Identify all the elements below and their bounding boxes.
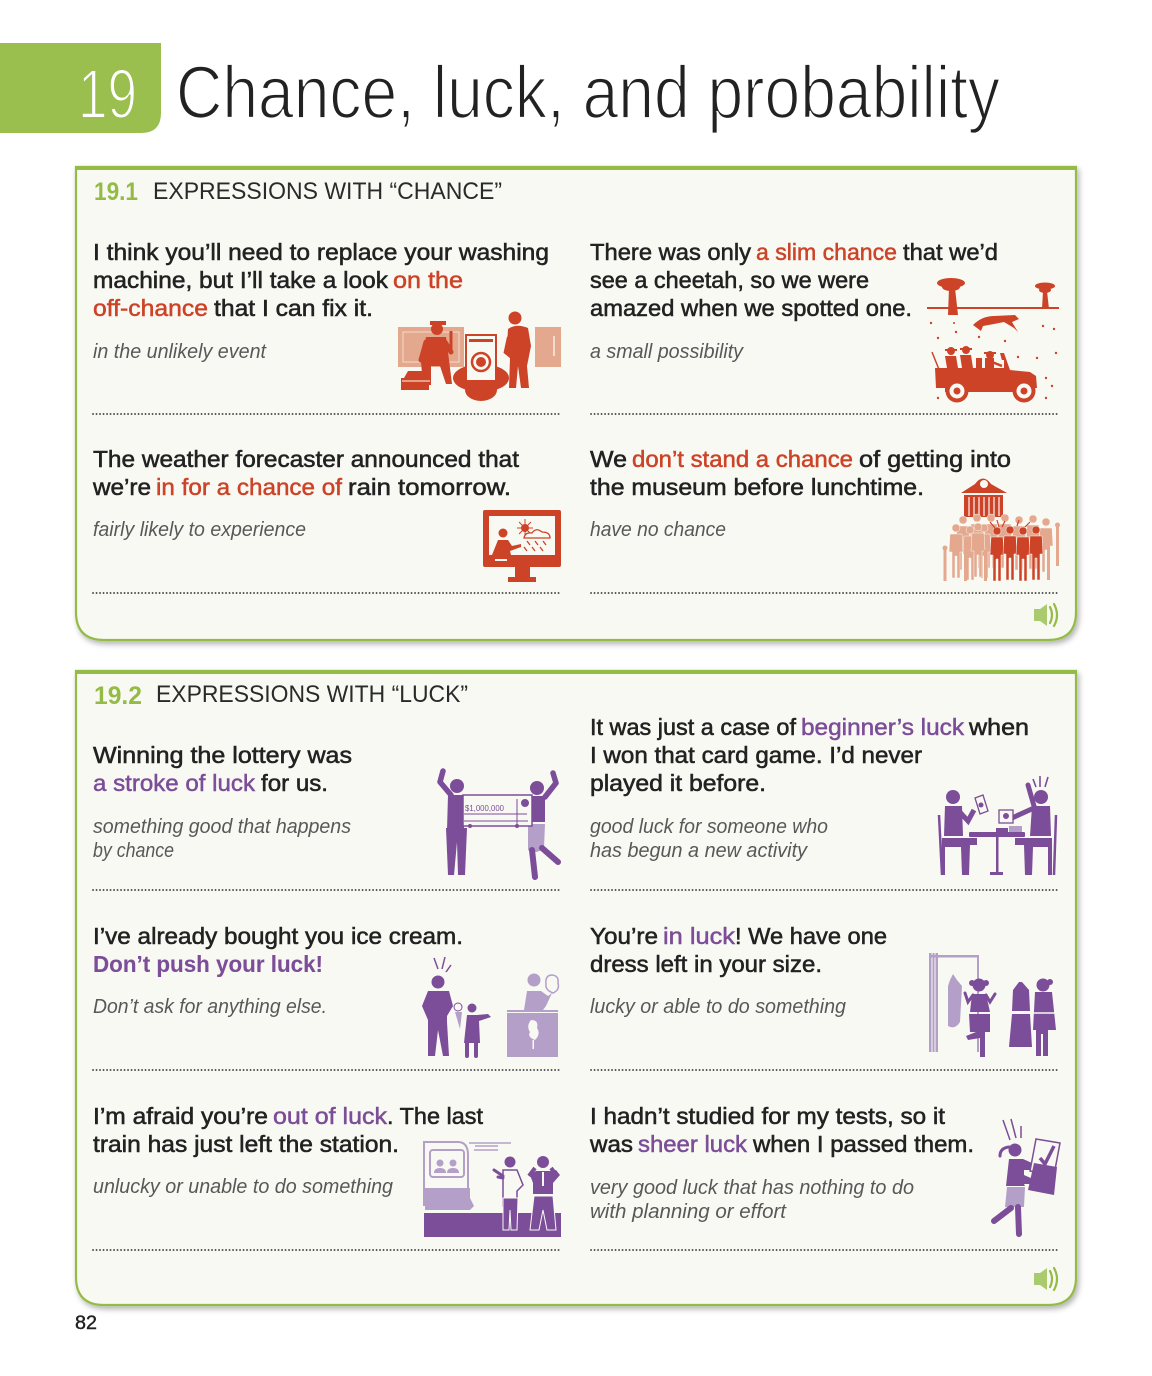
icon: ice cream and candy floss bbox=[422, 957, 558, 1057]
text block: don't push your luck bbox=[93, 923, 463, 1018]
heading: 19.2: 19.2 bbox=[94, 682, 142, 710]
text block: on the off-chance: I think you’ll need to replace your washing bbox=[93, 239, 549, 265]
text block: on the off-chance bbox=[93, 239, 549, 363]
text block: sheer luck: very good luck that has nothing to do bbox=[590, 1177, 914, 1199]
text block: sheer luck: sheer luck bbox=[638, 1131, 748, 1157]
text block: a slim chance: that we’d bbox=[903, 239, 998, 265]
text block: out of luck: train has just left the station. bbox=[93, 1131, 399, 1157]
text block: sheer luck: when I passed them. bbox=[752, 1131, 974, 1157]
icon: museum with crowd bbox=[942, 478, 1060, 581]
title: Chance, luck, and probability bbox=[176, 51, 1000, 134]
text block: a slim chance: a small possibility bbox=[590, 341, 744, 363]
icon: missed train bbox=[424, 1142, 561, 1237]
text block: in for a chance of: fairly likely to experience bbox=[93, 519, 306, 541]
chapter number tab bbox=[0, 43, 161, 133]
text block: out of luck: out of luck bbox=[273, 1103, 388, 1129]
icon: card game bbox=[939, 776, 1056, 875]
text block: on the off-chance: that I can fix it. bbox=[214, 295, 373, 321]
text block: out of luck: unlucky or unable to do something bbox=[93, 1176, 393, 1198]
text block: sheer luck bbox=[589, 1103, 974, 1223]
text block: beginner's luck bbox=[590, 714, 1029, 862]
text block: on the off-chance: on the bbox=[393, 267, 463, 293]
text block: a stroke of luck: a stroke of luck bbox=[93, 770, 256, 796]
text block: in luck bbox=[590, 923, 887, 1018]
text block: a slim chance: a slim chance bbox=[756, 239, 897, 265]
icon: weather forecast monitor bbox=[483, 510, 561, 582]
text block: beginner's luck: played it before. bbox=[590, 770, 766, 796]
text block: don't push your luck: Don’t push your luck! bbox=[93, 951, 323, 977]
text block: don't stand a chance: don’t stand a chance bbox=[632, 446, 853, 472]
text block: beginner's luck: good luck for someone who bbox=[590, 816, 828, 838]
panel: 19.2 expressions with luck bbox=[75, 670, 1077, 1305]
text block: beginner's luck: beginner’s luck bbox=[801, 714, 965, 740]
icon: student with test paper bbox=[994, 1119, 1060, 1234]
text block: don't stand a chance: the museum before lunchtime. bbox=[590, 474, 924, 500]
text block: don't push your luck: Don’t ask for anything else. bbox=[93, 996, 327, 1018]
text block: sheer luck: I hadn’t studied for my tests, so it bbox=[590, 1103, 946, 1129]
text block: in luck: in luck bbox=[663, 923, 736, 949]
text block: a stroke of luck: Winning the lottery was bbox=[93, 742, 352, 768]
dotted divider bbox=[93, 414, 1060, 593]
text block: a slim chance: There was only bbox=[590, 239, 752, 265]
dotted divider bbox=[93, 890, 1060, 1250]
text block: in luck: ! We have one bbox=[735, 923, 887, 949]
text block: in for a chance of bbox=[92, 446, 520, 541]
text block: don't stand a chance bbox=[590, 446, 1011, 541]
text block: a slim chance: amazed when we spotted one. bbox=[590, 295, 912, 321]
text block: on the off-chance: machine, but I’ll take a look bbox=[93, 267, 389, 293]
text block: beginner's luck: I won that card game. I’d never bbox=[590, 742, 922, 768]
icon: lottery cheque bbox=[440, 771, 558, 877]
text block: in luck: dress left in your size. bbox=[590, 951, 822, 977]
text block: a stroke of luck: by chance bbox=[93, 840, 174, 862]
text block: in luck: lucky or able to do something bbox=[590, 996, 846, 1018]
text block: in luck: You’re bbox=[590, 923, 658, 949]
text block: don't push your luck: I’ve already bought you ice cream. bbox=[93, 923, 463, 949]
text block: in for a chance of: rain tomorrow. bbox=[348, 474, 511, 500]
heading: 19.1: 19.1 bbox=[94, 178, 138, 206]
text block: don't stand a chance: We bbox=[590, 446, 627, 472]
text block: in for a chance of: The weather forecaster announced that bbox=[93, 446, 520, 472]
audio icon bbox=[1034, 604, 1057, 626]
page number: 82 bbox=[75, 1313, 97, 1334]
text block: a stroke of luck bbox=[93, 742, 352, 862]
panel: 19.1 expressions with chance bbox=[75, 166, 1077, 640]
icon: cheetah safari bbox=[927, 278, 1059, 402]
text block: beginner's luck: when bbox=[968, 714, 1029, 740]
text block: out of luck bbox=[93, 1103, 484, 1198]
text block: beginner's luck: has begun a new activity bbox=[590, 840, 808, 862]
heading: 19.2: EXPRESSIONS WITH “LUCK” bbox=[156, 681, 468, 708]
text block: in for a chance of: in for a chance of bbox=[156, 474, 343, 500]
text block: a stroke of luck: for us. bbox=[261, 770, 328, 796]
text block: out of luck: . The last bbox=[387, 1103, 484, 1129]
text block: on the off-chance: in the unlikely event bbox=[93, 341, 267, 363]
text block: sheer luck: with planning or effort bbox=[590, 1201, 787, 1223]
text block: beginner's luck: It was just a case of bbox=[590, 714, 797, 740]
text block: a slim chance bbox=[590, 239, 998, 363]
text block: a stroke of luck: something good that happens bbox=[93, 816, 351, 838]
audio icon bbox=[1034, 1268, 1057, 1290]
heading: 19.1: EXPRESSIONS WITH “CHANCE” bbox=[153, 178, 502, 205]
text block: don't stand a chance: of getting into bbox=[859, 446, 1011, 472]
text block: out of luck: I’m afraid you’re bbox=[93, 1103, 268, 1129]
text block: don't stand a chance: have no chance bbox=[590, 519, 726, 541]
text block: sheer luck: was bbox=[589, 1131, 633, 1157]
text block: a slim chance: see a cheetah, so we were bbox=[590, 267, 869, 293]
icon: washing machine repair bbox=[398, 312, 561, 401]
icon: dress shop bbox=[929, 953, 1056, 1057]
icon: lottery cheque: $1,000,000 bbox=[465, 803, 504, 813]
chapter number tab: 19 bbox=[78, 55, 137, 133]
text block: in for a chance of: we’re bbox=[92, 474, 151, 500]
text block: on the off-chance: off-chance bbox=[93, 295, 208, 321]
